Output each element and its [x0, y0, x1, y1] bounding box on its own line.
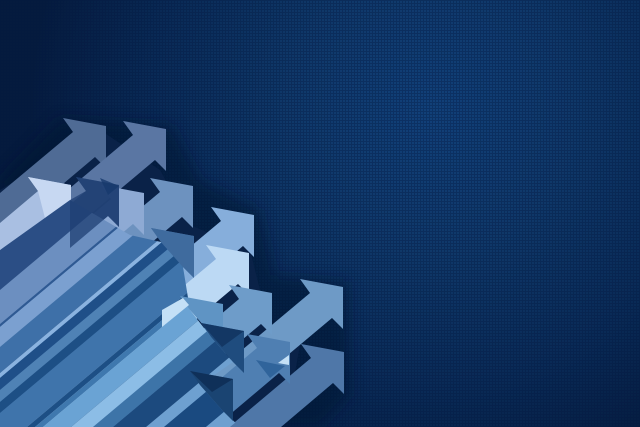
- arrow: light periwinkle: [0, 185, 144, 336]
- arrow head: dark blue centre: [151, 228, 194, 278]
- arrow: pale upper left: [0, 177, 71, 267]
- arrow: top slate: [0, 121, 166, 290]
- dark backing of arrow cluster: [0, 130, 300, 427]
- barb shadow: bottom: [190, 371, 233, 392]
- barb shadow: right of centre: [256, 360, 285, 378]
- arrow: long right lower: [229, 344, 344, 427]
- arrow head: dark navy centre: [201, 323, 244, 373]
- arrow head: dark navy bottom: [190, 371, 233, 421]
- arrow: blue centre right: [87, 285, 272, 427]
- pale highlight: centre: [162, 298, 189, 327]
- pale arrow head highlight: [28, 177, 71, 222]
- barb shadow: upper left: [100, 178, 119, 195]
- shadow behind arrow cluster: [0, 118, 350, 427]
- arrow: sky blue centre top: [0, 207, 254, 427]
- arrow head: mid blue centre: [180, 296, 223, 346]
- barb shadow: centre: [201, 323, 244, 347]
- arrow: dark blue centre: [0, 228, 194, 421]
- arrow: long right upper: [150, 279, 343, 427]
- arrow: blue lower centre: [163, 334, 290, 427]
- arrow: top left slate: [0, 118, 106, 237]
- arrow: dark translucent upper left: [0, 177, 119, 307]
- diagonal stripes: arrow shafts: [0, 200, 235, 427]
- arrow: pale blue centre: [15, 245, 249, 427]
- translucent dark panel: upper left arrow: [70, 177, 119, 248]
- arrow: mid blue top: [0, 178, 193, 370]
- pale highlight: lower right: [278, 355, 289, 365]
